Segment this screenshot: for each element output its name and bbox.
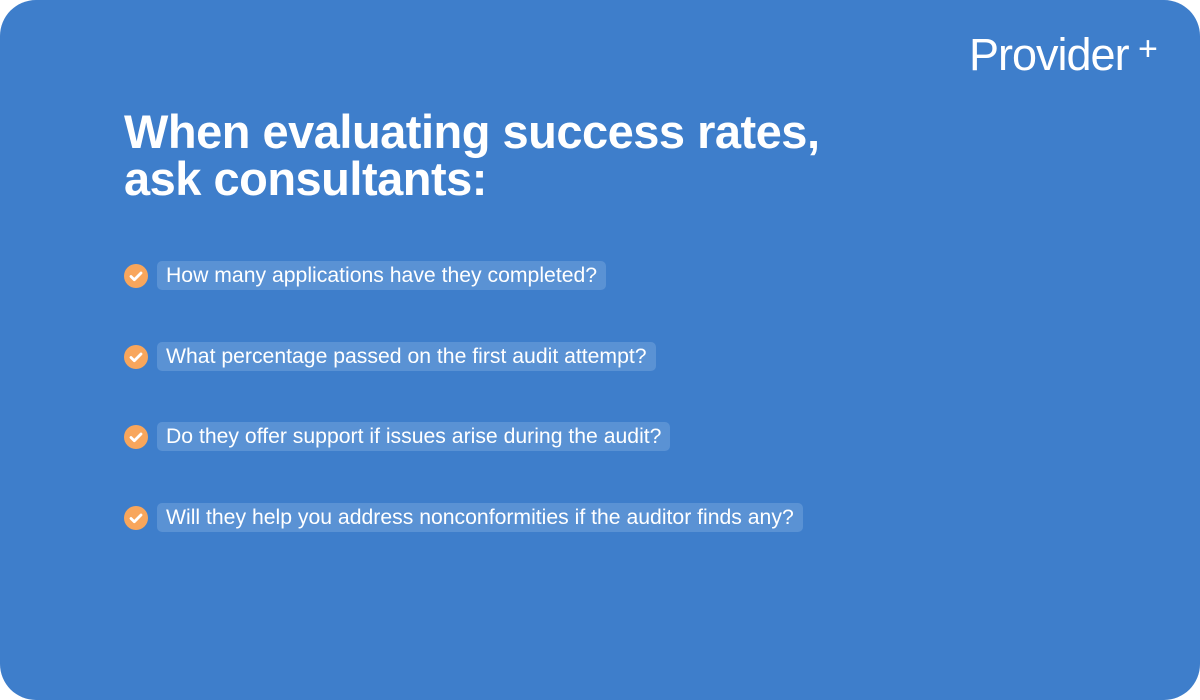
card background: How many applications have they completed? bbox=[166, 264, 597, 287]
card background: What percentage passed on the first audit attempt? bbox=[166, 345, 647, 368]
title bbox=[124, 105, 820, 205]
card background: Do they offer support if issues arise during the audit? bbox=[166, 425, 661, 448]
logo: Provider bbox=[969, 29, 1129, 80]
title: ask consultants: bbox=[124, 152, 487, 205]
item 2 bbox=[124, 342, 656, 371]
item 1 bbox=[124, 261, 606, 290]
card background: Will they help you address nonconformities if the auditor finds any? bbox=[166, 506, 794, 529]
title: When evaluating success rates, bbox=[124, 105, 820, 158]
item 3 bbox=[124, 422, 670, 451]
item 4 bbox=[124, 503, 803, 532]
logo plus: + bbox=[1138, 30, 1158, 68]
